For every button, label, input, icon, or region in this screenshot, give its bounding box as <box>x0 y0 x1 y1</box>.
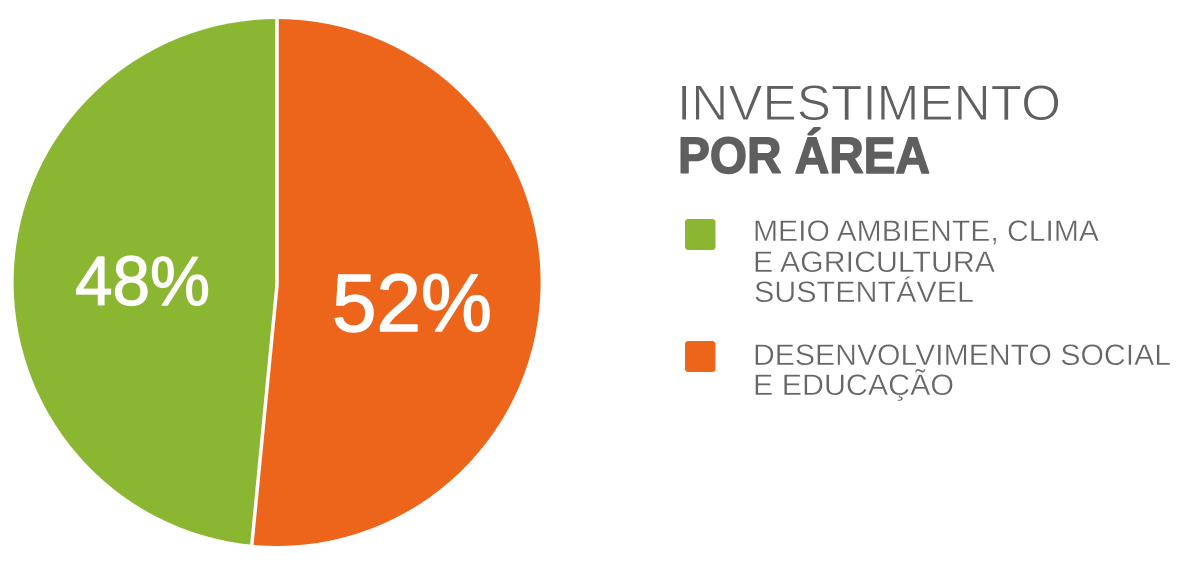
legend <box>685 215 1171 402</box>
legend label: desenvolvimento social e educação <box>753 339 1171 402</box>
legend label: meio ambiente, clima e agricultura sustentável: SUSTENTÁVEL <box>754 276 974 309</box>
legend label: meio ambiente, clima e agricultura sustentável <box>753 215 1099 309</box>
legend item: desenvolvimento social <box>685 339 1171 402</box>
heading line: POR ÁREA: POR ÁREA <box>678 127 930 184</box>
swatch: orange <box>685 341 716 372</box>
pie chart <box>14 17 541 548</box>
value label: 52%: 52% <box>332 258 492 349</box>
swatch: green <box>685 219 716 250</box>
heading <box>677 75 1061 184</box>
heading line: INVESTIMENTO: INVESTIMENTO <box>677 75 1061 131</box>
legend label: meio ambiente, clima e agricultura sustentável: E AGRICULTURA <box>753 246 995 279</box>
legend item: meio ambiente <box>685 215 1099 309</box>
slice: green 48% <box>14 19 277 545</box>
value label: 48%: 48% <box>75 242 210 320</box>
legend label: desenvolvimento social e educação: E EDUCAÇÃO <box>753 368 954 402</box>
legend label: meio ambiente, clima e agricultura sustentável: MEIO AMBIENTE, CLIMA <box>753 215 1099 248</box>
slice: orange 52% <box>252 19 541 546</box>
legend label: desenvolvimento social e educação: DESENVOLVIMENTO SOCIAL <box>753 339 1171 372</box>
